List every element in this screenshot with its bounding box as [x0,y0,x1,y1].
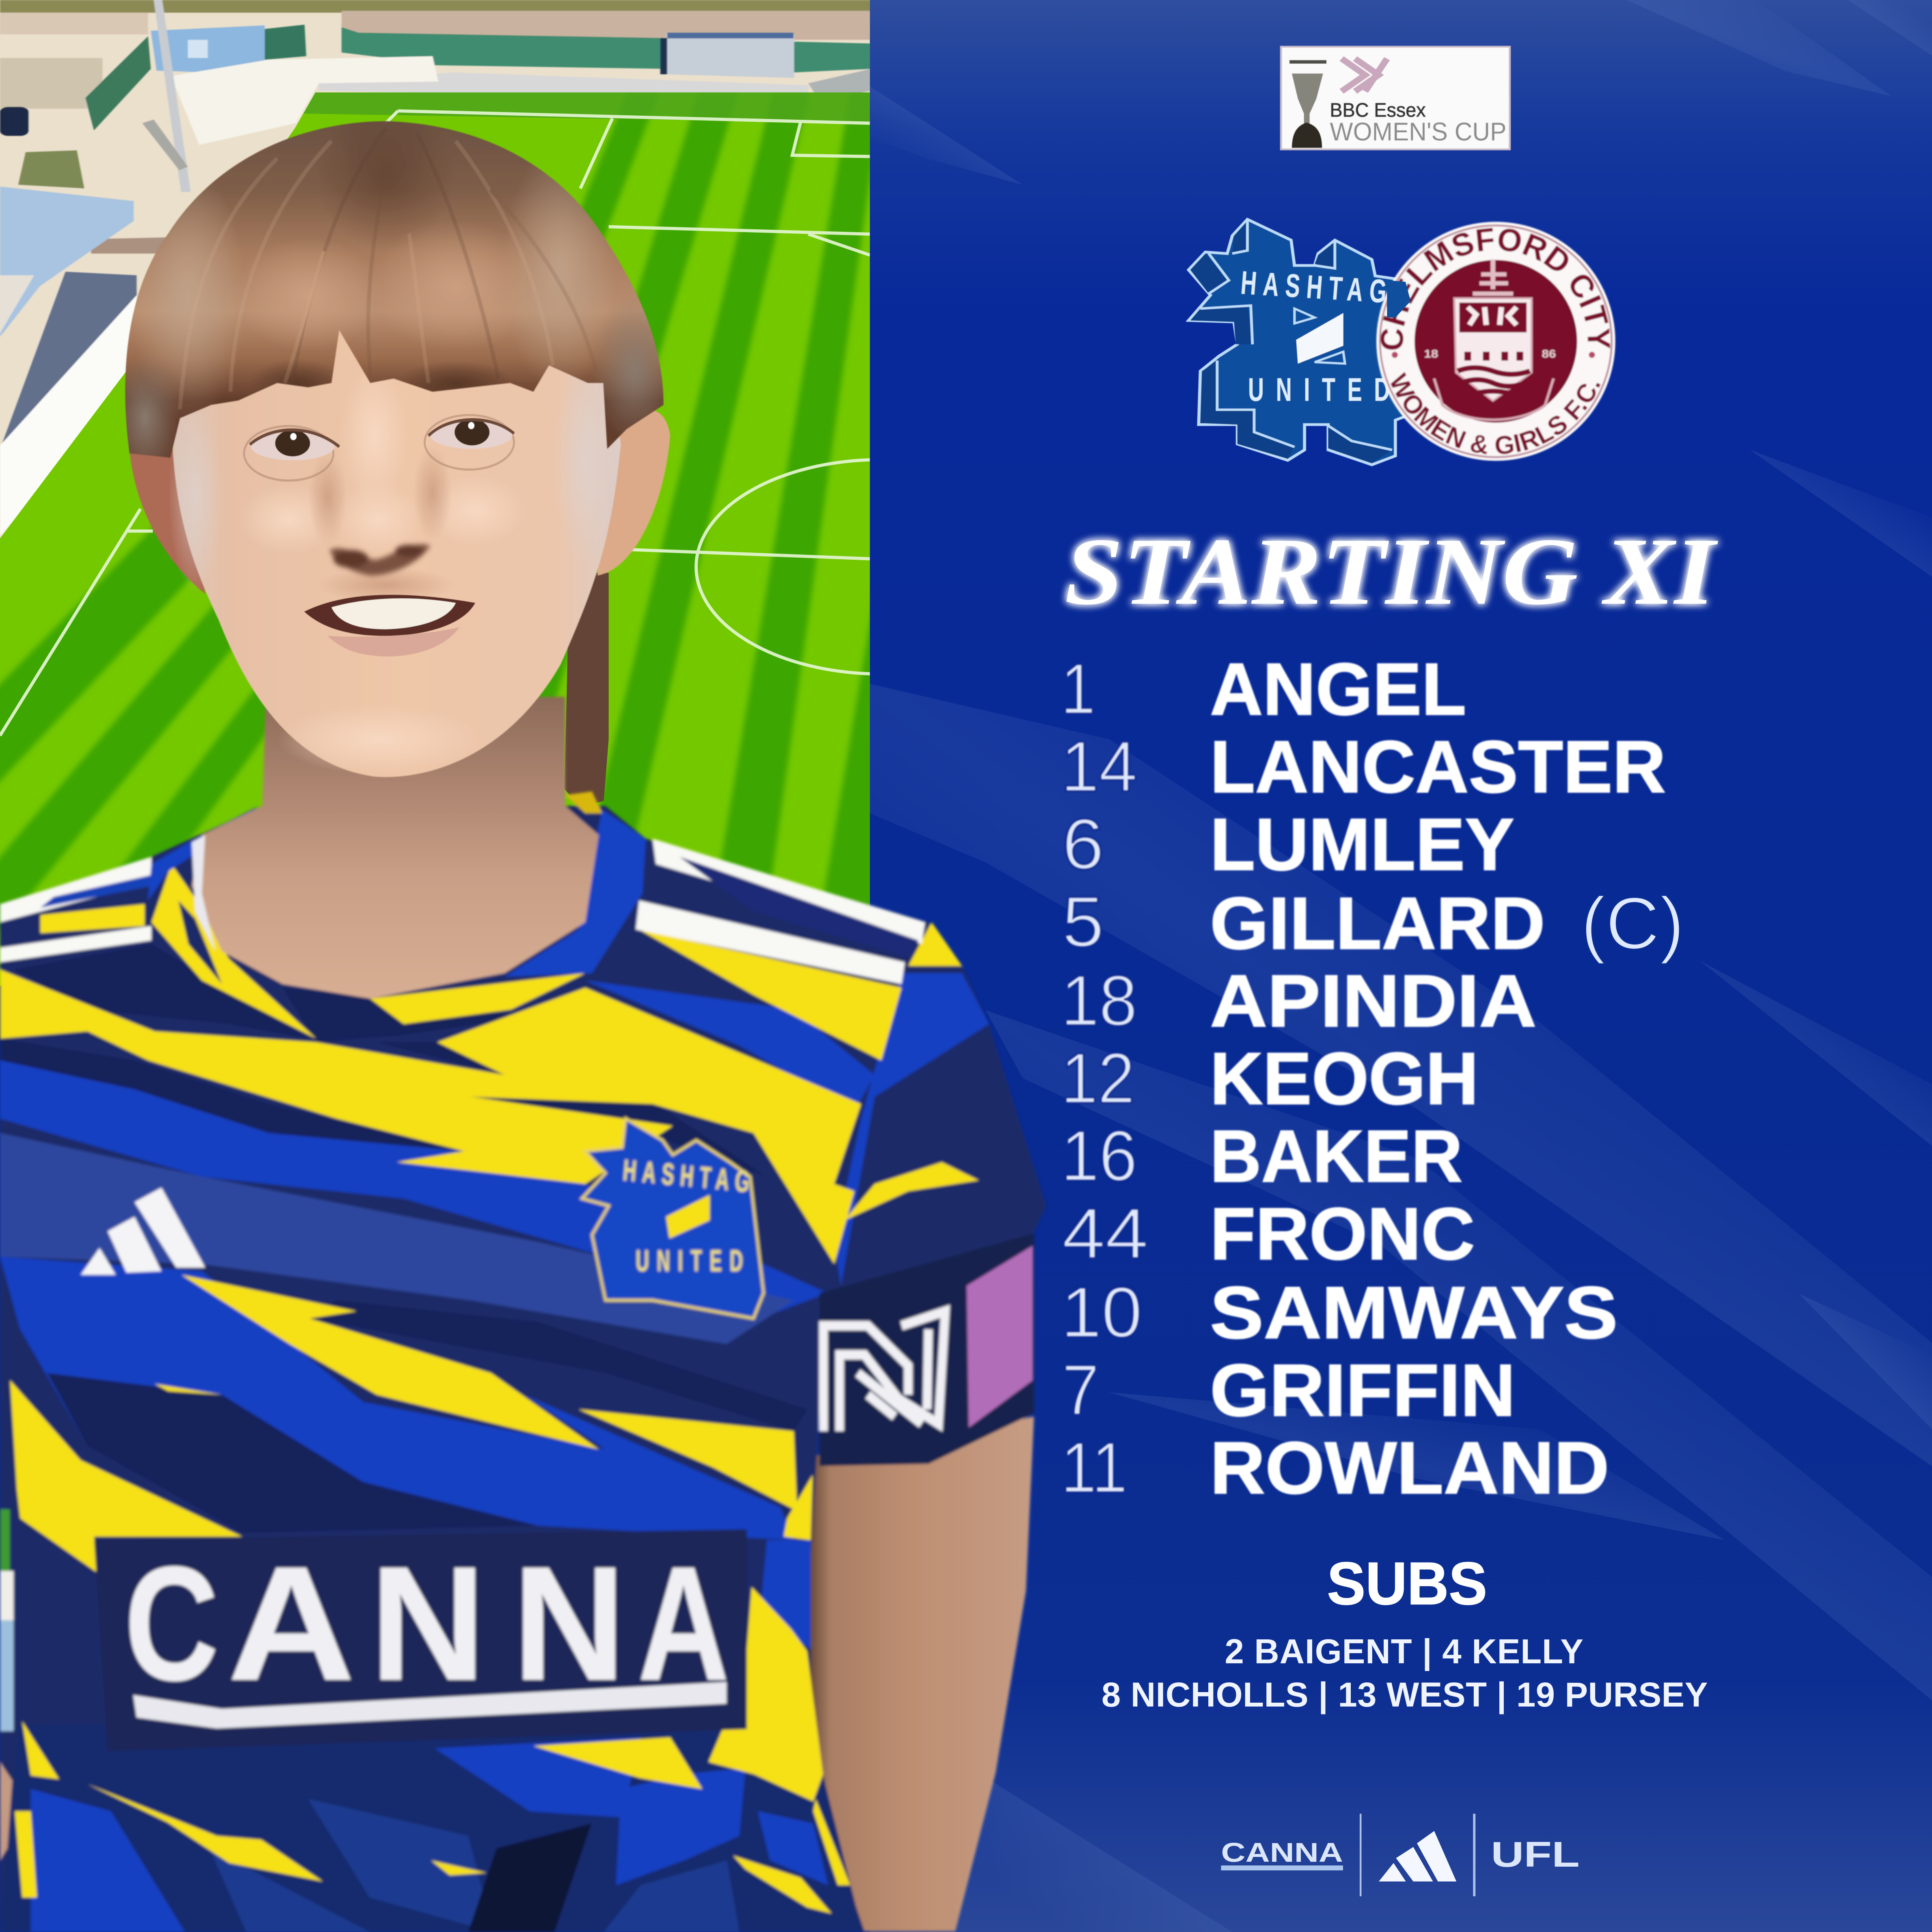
mown stripes [0,93,1023,986]
face shading [168,361,615,774]
chelmsford city crest: WOMEN & GIRLS F.C. [1384,369,1606,460]
sponsor logos: UFL [1491,1834,1580,1874]
mouth [304,595,475,657]
hair tone detail [110,101,677,484]
icon: adidas mark on shirt [81,1188,205,1275]
player names: LANCASTER [1210,725,1666,808]
neck [192,697,599,998]
shirt numbers: 10 [1061,1273,1142,1352]
shoulder stripes [0,839,925,984]
yellow shards [0,864,979,1573]
left eye [244,426,339,481]
navy shards [0,944,841,1533]
cup logo [1281,47,1510,149]
subs list: 2 BAIGENT | 4 KELLY [1225,1632,1583,1671]
shirt numbers: 16 [1061,1116,1137,1196]
sponsor banner: N [513,1532,625,1714]
crest shield: 86 [1542,348,1556,360]
subs list [1102,1632,1708,1714]
ears and face base [129,286,670,777]
crest shield: 18 [1424,348,1438,360]
icon: adidas mark [1379,1831,1456,1882]
shirt numbers: 6 [1062,804,1104,884]
shirt numbers [1061,649,1148,1507]
pitch [0,93,870,985]
stadium surroundings [0,0,871,536]
panel: blue background [870,0,1932,1932]
player: arm and shirt [0,697,1046,1932]
cup logo: WOMEN'S CUP [1330,118,1506,146]
subs list: 8 NICHOLLS | 13 WEST | 19 PURSEY [1102,1675,1708,1714]
player names: GILLARD [1210,882,1545,964]
right arm [807,1417,1034,1931]
player names: GRIFFIN [1210,1349,1516,1432]
icon: pink mark [1341,58,1387,91]
icon: N logo [824,1311,945,1431]
player: ponytail [564,573,609,807]
player names: FRONC [1210,1192,1475,1275]
crest overlap corner [1387,280,1410,317]
icon: trophy [1289,60,1326,148]
heading: starting XI: STARTING XI [1065,518,1718,625]
shirt numbers: 11 [1061,1428,1128,1507]
shirt lower part [0,1587,862,1932]
crest on shirt: UNITED [636,1244,743,1278]
panel: stadium photo [0,0,870,985]
sponsor logos [1221,1814,1580,1896]
right eye [425,415,514,470]
face [172,286,621,777]
subs heading: SUBS [1327,1550,1487,1617]
nose [330,544,431,576]
blue shards [0,973,989,1649]
sponsor banner [94,1529,747,1751]
chelmsford city crest: CHELMSFORD CITY [1374,221,1617,351]
shirt numbers: 12 [1061,1039,1135,1118]
crest on shirt: HASHTAG [622,1154,751,1199]
player names [1210,648,1666,1509]
player: head [110,101,677,777]
shirt upper part [0,697,1046,1931]
sponsor banner: N [370,1532,486,1714]
shirt numbers: 1 [1061,649,1095,729]
collar blue [148,806,646,977]
left ear [129,449,205,594]
armband [819,1233,1034,1466]
hair and fringe [110,101,677,484]
cup logo: BBC Essex [1330,99,1426,121]
player names: LUMLEY [1210,803,1514,886]
sponsor banner: A [638,1532,729,1714]
interior channels [1190,221,1392,463]
crest shield [1424,259,1556,420]
player names: SAMWAYS [1210,1271,1618,1354]
pitch markings [0,111,1066,735]
shirt body [0,806,1046,1931]
hashtag united crest: HASHTAG [1240,264,1388,310]
background streaks [870,0,1932,1932]
chelmsford city crest [1374,221,1617,461]
chest highlight [0,1133,794,1344]
captain marker: (C) [1581,882,1684,964]
hair strands [180,128,599,409]
player names: KEOGH [1210,1037,1479,1120]
shirt numbers: 14 [1061,727,1137,806]
player names: BAKER [1210,1115,1462,1197]
sponsor banner: A [227,1532,355,1714]
crest on shirt [582,1119,763,1318]
shirt numbers: 7 [1062,1350,1099,1430]
shirt numbers: 44 [1062,1194,1148,1273]
background visible at left edge [0,1509,13,1861]
shirt numbers: 5 [1062,882,1104,962]
player names: ANGEL [1210,648,1466,731]
shirt numbers: 18 [1061,961,1137,1041]
player names: APINDIA [1210,960,1537,1042]
sponsor banner: C [125,1532,219,1714]
hashtag united crest: UNITED [1248,371,1390,408]
sponsor logos: CANNA [1221,1838,1343,1868]
hashtag united crest [1188,219,1419,465]
right ear [597,410,670,576]
player names: ROWLAND [1210,1426,1609,1509]
